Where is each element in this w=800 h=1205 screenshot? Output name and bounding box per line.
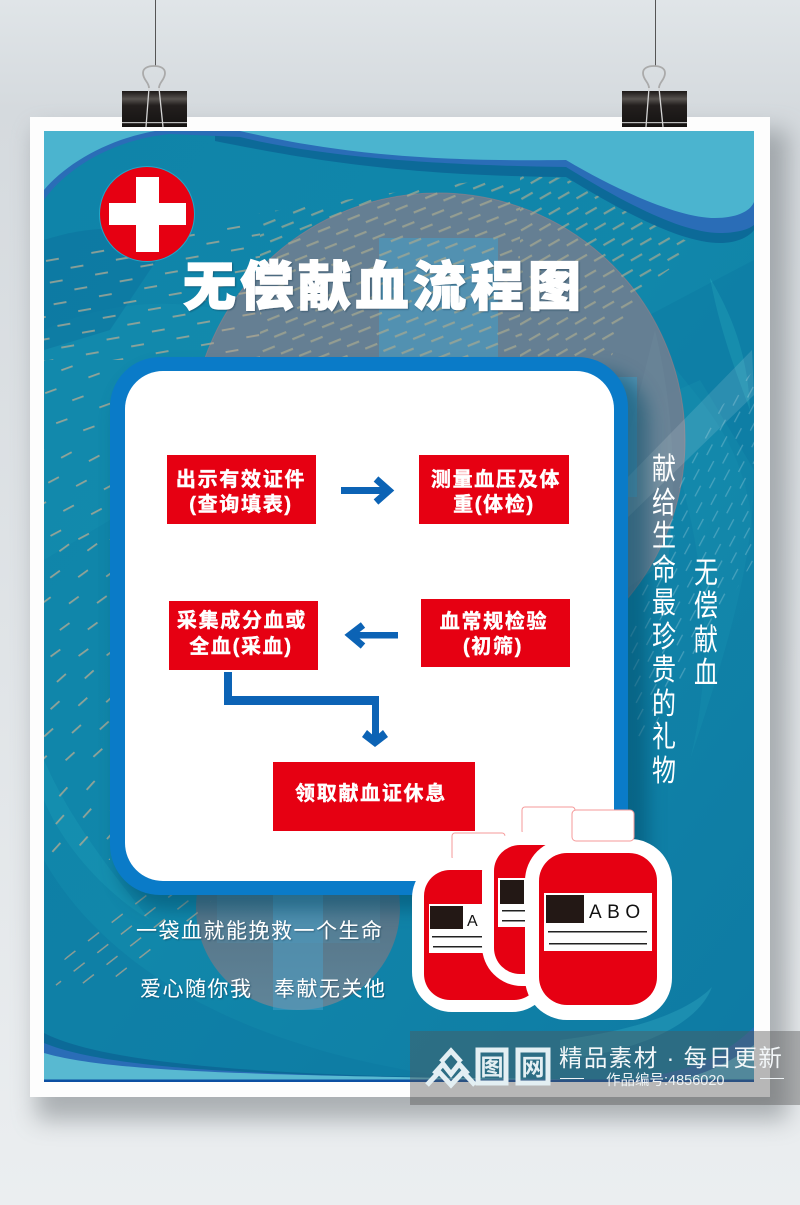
title: 无偿献血流程图 [183, 258, 586, 317]
step 2 box: 重(体检) [453, 492, 535, 516]
small grey circle [196, 895, 400, 1010]
bottom wave right [640, 1027, 754, 1078]
blood bag front [525, 810, 672, 1020]
vertical slogan long: 给 [652, 485, 676, 520]
blood bag left: A [467, 913, 478, 930]
elbow arrow down [224, 672, 388, 747]
step 4 box: 全血(采血) [189, 634, 293, 658]
slogan left: 奉献无关他 [274, 978, 386, 1001]
right dash patch [625, 370, 754, 750]
step 3 box: (初筛) [463, 634, 523, 658]
watermark number: 作品编号:4856020 [606, 1072, 724, 1089]
panel shadow [118, 370, 648, 910]
vertical slogan short: 偿 [694, 588, 718, 623]
watermark logo [427, 1050, 548, 1085]
swirl shapes [44, 304, 330, 560]
step 1 box: 出示有效证件 [176, 468, 306, 491]
blood bag middle [482, 807, 622, 986]
watermark strip: 图 [480, 1054, 504, 1080]
watermark strip: 网 [522, 1054, 544, 1080]
watermark strip [410, 1031, 800, 1105]
vertical slogan short: 无 [694, 555, 718, 590]
top wave light area [240, 131, 754, 218]
lower left dash patch [56, 895, 211, 986]
vertical slogan long: 最 [652, 585, 676, 620]
large grey circle [204, 192, 686, 598]
white poster sheet [30, 117, 770, 1097]
vertical slogan long: 献 [652, 451, 676, 486]
step 1 box: (查询填表) [189, 493, 293, 516]
step 4 box: 采集成分血或 [177, 608, 307, 632]
step 5 box: 领取献血证休息 [295, 781, 447, 805]
light fan inside circle [646, 522, 672, 576]
step 3 box: 血常规检验 [440, 609, 548, 633]
step 3 box [421, 599, 570, 667]
top dash field [44, 176, 700, 360]
translucent cross in small circle [217, 895, 380, 1010]
left dash field [44, 360, 110, 860]
binder clip right [622, 0, 687, 127]
slogan left: 爱心随你我 [140, 978, 252, 1001]
bottom edge line [44, 1080, 754, 1082]
blood bag left [412, 833, 552, 1012]
vertical slogan short: 献 [694, 622, 718, 657]
vertical slogan long: 贵 [652, 652, 676, 687]
red cross logo [100, 166, 194, 262]
blood bag front: ABO [589, 902, 646, 923]
vertical slogan long: 珍 [652, 619, 676, 654]
step 4 box [169, 601, 318, 670]
step 2 box [419, 455, 569, 524]
step 2 box: 测量血压及体 [431, 468, 561, 491]
vertical slogan long: 礼 [652, 719, 676, 754]
top left corner light area [44, 131, 155, 190]
diagonal light band [625, 350, 754, 520]
poster shadow [36, 130, 788, 1120]
arrow right [341, 479, 389, 502]
top wave blue band [44, 131, 754, 233]
binder clip left [122, 0, 187, 127]
step 5 box [273, 762, 475, 831]
vertical slogan long: 的 [652, 686, 676, 721]
vertical slogan long: 命 [652, 552, 676, 587]
translucent cross in large circle [379, 238, 637, 497]
step 1 box [167, 455, 316, 524]
vertical slogan long: 物 [652, 753, 676, 788]
vertical slogan long: 生 [652, 518, 676, 553]
watermark slogan: 精品素材 · 每日更新 [559, 1045, 783, 1071]
arrow left [350, 625, 398, 646]
slogan left [136, 920, 386, 1001]
vertical slogan short: 血 [694, 655, 718, 690]
top wave dark band [215, 131, 754, 243]
bottom wave left [44, 1033, 428, 1078]
flow chart panel [110, 357, 628, 895]
slogan left: 一袋血就能挽救一个生命 [136, 920, 384, 943]
poster artwork background [44, 131, 754, 1082]
